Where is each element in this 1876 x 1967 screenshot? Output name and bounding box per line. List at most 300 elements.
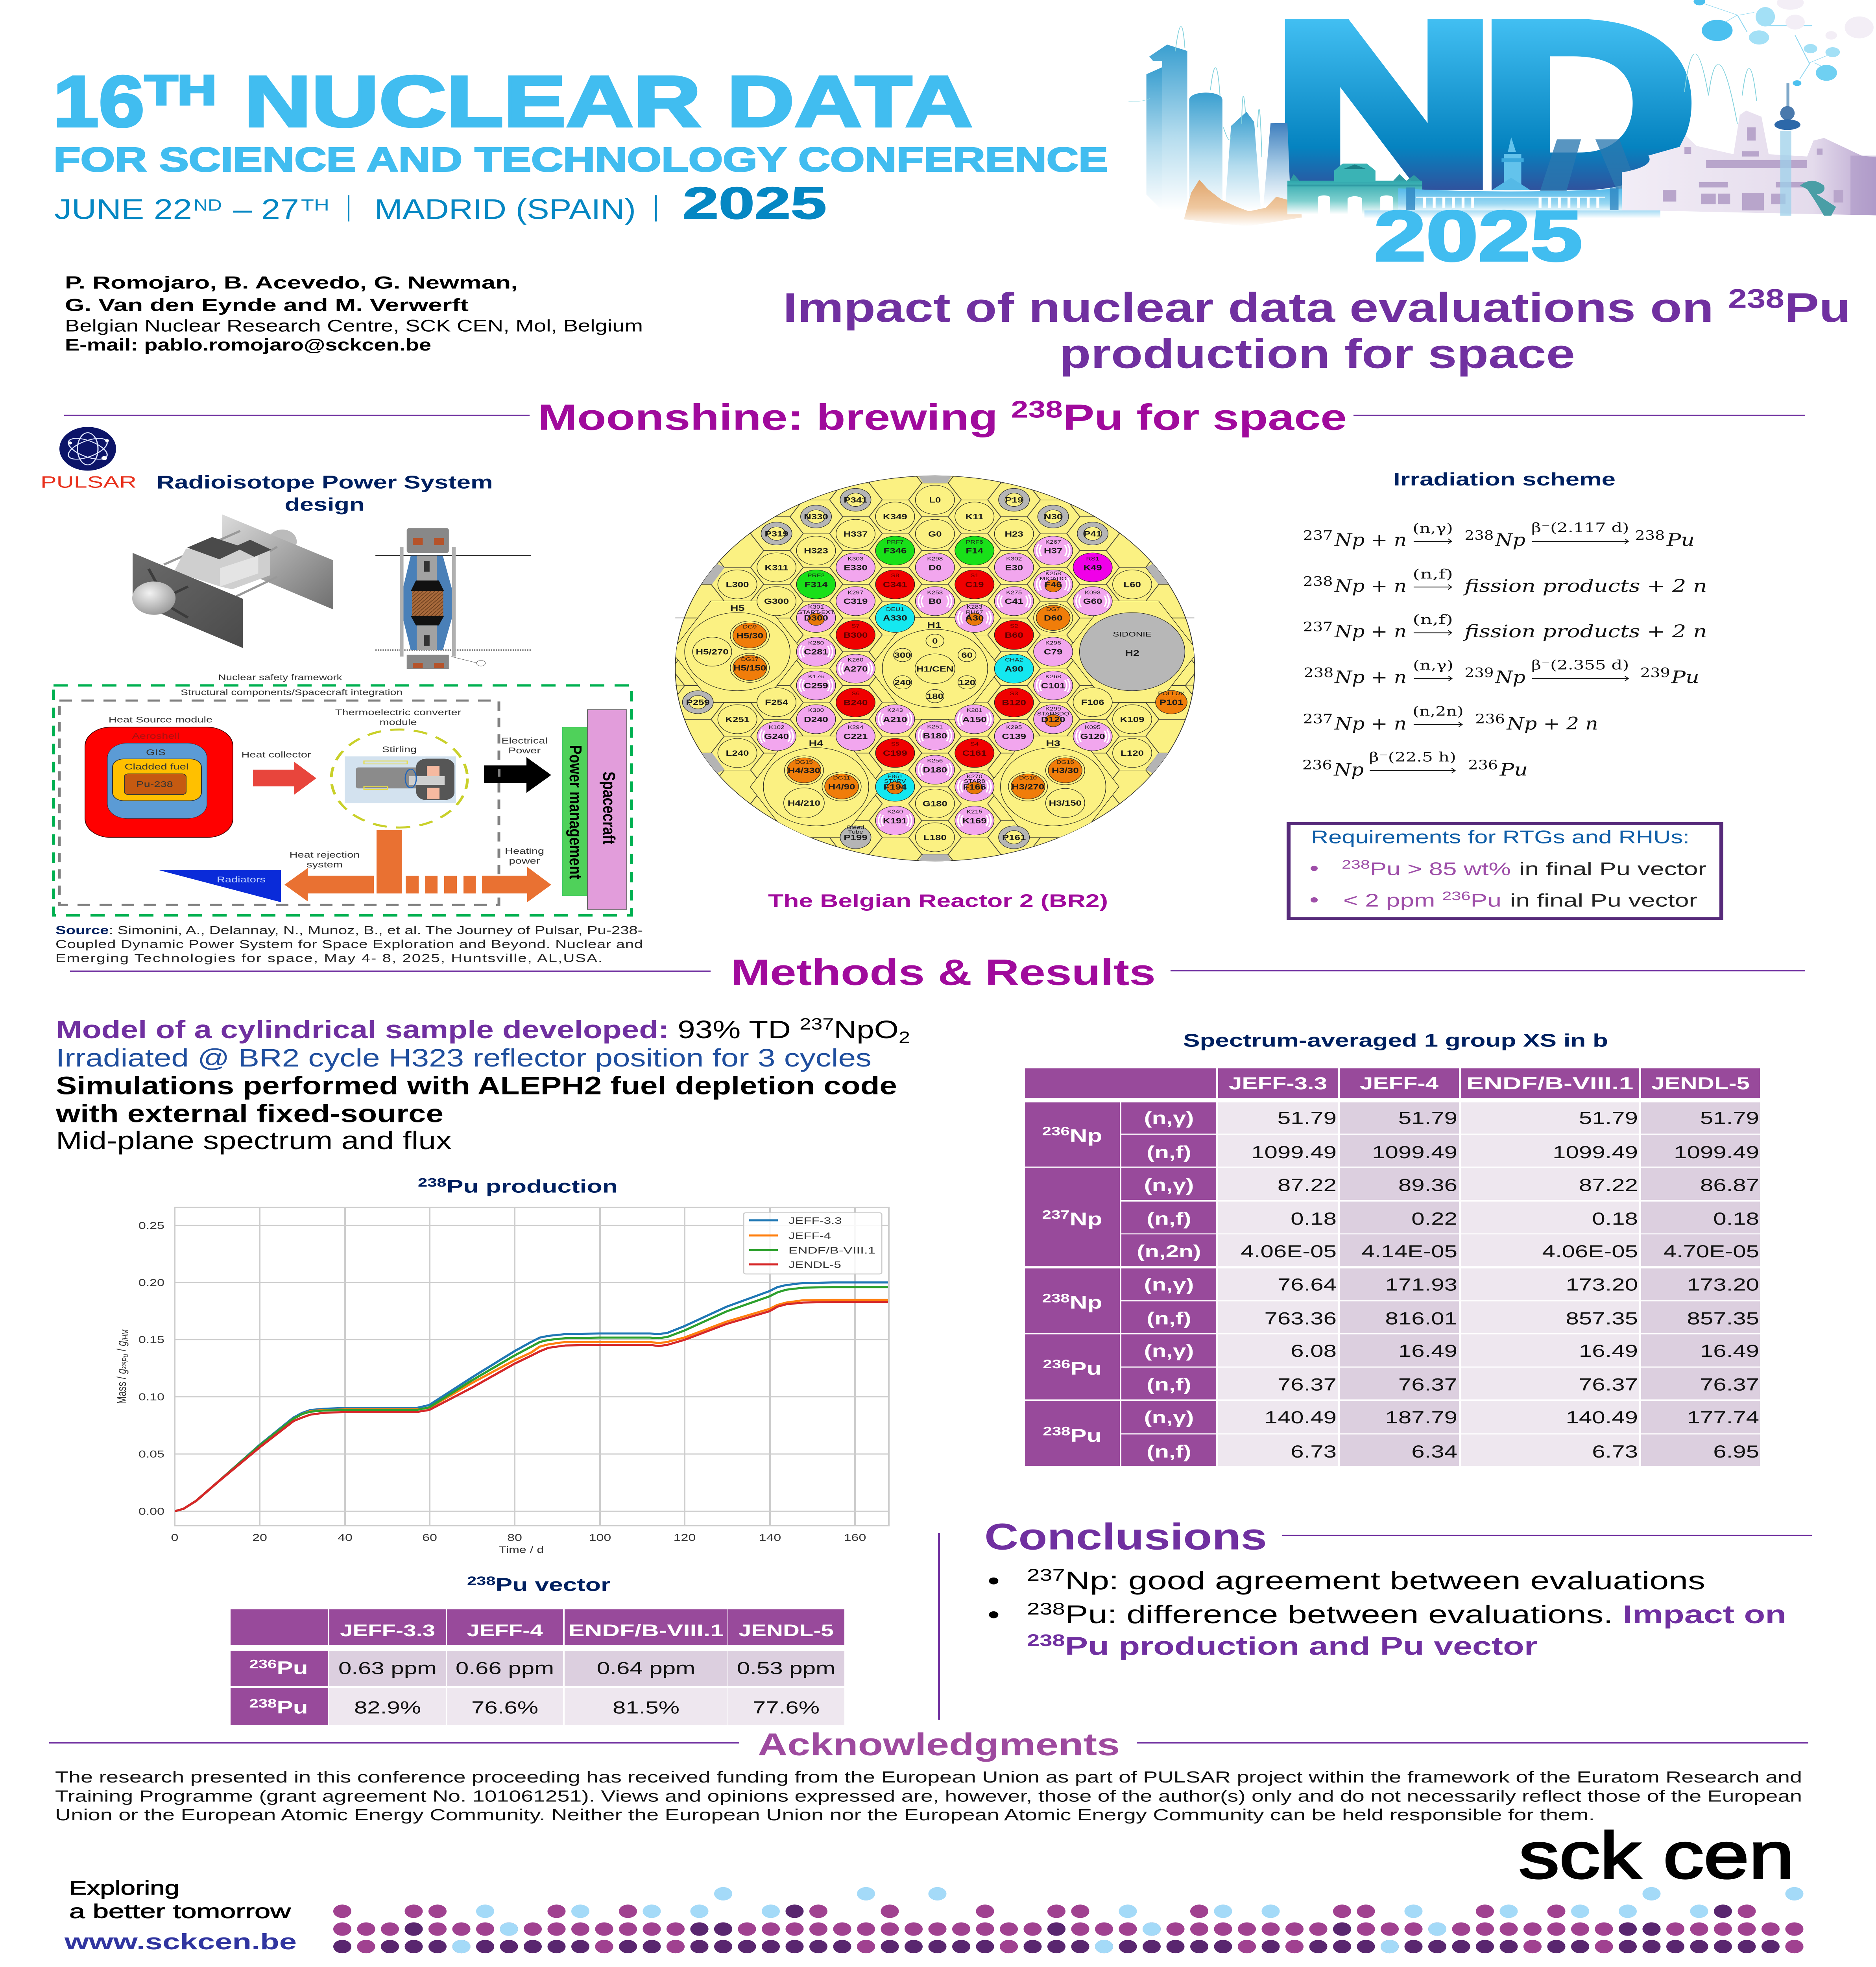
chart title: 238 bbox=[418, 1176, 447, 1189]
reaction 1: 237 bbox=[1303, 528, 1333, 543]
pink channels: C259 bbox=[804, 681, 828, 690]
reaction 5: Np + 2 n bbox=[1506, 714, 1598, 734]
title: 16th nuclear data: TH bbox=[145, 66, 216, 113]
model line: Model of a cylindrical sample developed: 93% TD bbox=[56, 1016, 800, 1044]
spectrum line: Mid-plane spectrum and flux bbox=[56, 1127, 452, 1155]
standard channels bbox=[692, 485, 1152, 852]
orange channels: DG9 bbox=[743, 624, 757, 630]
pink channels: K260 bbox=[848, 657, 864, 663]
y axis title: iHM bbox=[121, 1329, 131, 1341]
title: 16th nuclear data: 16 bbox=[53, 61, 144, 142]
radiators: Radiators bbox=[217, 875, 266, 884]
cyan channels: CHA2 bbox=[1005, 657, 1023, 663]
flux trap labels: H2 bbox=[1125, 649, 1139, 658]
reaction 3: Np + n bbox=[1334, 622, 1407, 642]
x tick labels: 120 bbox=[674, 1532, 696, 1543]
legend: JEFF-4 bbox=[788, 1231, 831, 1241]
isotope and reaction headers: (n,γ) bbox=[1144, 1408, 1194, 1427]
Kio towers bbox=[1540, 139, 1643, 203]
reaction 2: 238 bbox=[1303, 574, 1333, 589]
cross-section table title: Spectrum-averaged 1 group XS in b bbox=[1183, 1030, 1608, 1051]
table header bbox=[231, 1609, 844, 1645]
heat source module: Heat Source module bbox=[109, 715, 212, 725]
JEFF-3.3 values: 1099.49 bbox=[1251, 1142, 1337, 1162]
orange channels: DG17 bbox=[741, 657, 759, 662]
subtitle: for science and technology conference: FOR SCIENCE AND TECHNOLOGY CONFERENCE bbox=[54, 140, 1108, 179]
orange channels: DG15 bbox=[795, 760, 813, 765]
orange channels: DG16 bbox=[1056, 760, 1074, 765]
pink channels: K280 bbox=[808, 640, 824, 646]
source citation bbox=[55, 924, 643, 965]
y tick labels: 0.20 bbox=[138, 1277, 164, 1288]
pink channels: G120 bbox=[1080, 732, 1105, 741]
isotope and reaction headers: 238 bbox=[1042, 1292, 1070, 1305]
ring channels: P161 bbox=[1002, 833, 1026, 842]
bullet 2: • bbox=[988, 1600, 1000, 1629]
reaction 1: 238 bbox=[1635, 528, 1665, 543]
bullet 1: Np: good agreement between evaluations bbox=[1065, 1567, 1705, 1595]
isotope and reaction headers: (n,γ) bbox=[1144, 1341, 1194, 1361]
JEFF-3.3 values: 76.64 bbox=[1278, 1275, 1337, 1295]
model line: NpO bbox=[834, 1016, 899, 1044]
line chart: 238Pu production bbox=[114, 1207, 889, 1555]
requirement 2 bbox=[1311, 889, 1697, 911]
RPS engineering renders bbox=[132, 514, 531, 669]
standard channels: H4/210 bbox=[788, 799, 820, 807]
reaction 1: Pu bbox=[1666, 530, 1695, 550]
heading: irradiation scheme: Irradiation scheme bbox=[1393, 469, 1616, 489]
standard channels: L180 bbox=[923, 833, 947, 842]
orange channels: H3/270 bbox=[1012, 782, 1044, 791]
magenta channel K49 bbox=[1073, 553, 1112, 582]
bullet 1: 237 bbox=[1027, 1565, 1065, 1584]
isotope and reaction headers: (n,f) bbox=[1147, 1442, 1191, 1461]
reaction 4: 238 bbox=[1304, 665, 1333, 680]
tagline: Exploring bbox=[69, 1877, 179, 1899]
irradiation line: Irradiated @ BR2 cycle H323 reflector position for 3 cycles bbox=[56, 1044, 872, 1072]
pink channels: G240 bbox=[764, 732, 789, 741]
heading: RPS design: Radioisotope Power System bbox=[156, 472, 493, 493]
bullet 2: Pu production and Pu vector bbox=[1065, 1632, 1538, 1661]
JENDL-5 values: 16.49 bbox=[1700, 1341, 1759, 1361]
standard channels: H5/270 bbox=[696, 648, 729, 656]
conclusions heading: Conclusions bbox=[984, 1516, 1267, 1557]
isotope and reaction headers: Pu bbox=[1070, 1426, 1102, 1446]
ring channels: P41 bbox=[1084, 530, 1102, 538]
JEFF-3.3 values: 76.37 bbox=[1278, 1375, 1337, 1394]
reaction 1: Np + n bbox=[1334, 530, 1407, 550]
standard channels: 60 bbox=[961, 651, 973, 659]
orange channels: H5/30 bbox=[736, 631, 763, 640]
ring channels: P19 bbox=[1005, 496, 1023, 504]
row 236Pu: 0.64 ppm bbox=[597, 1659, 695, 1678]
reaction 2: (n,f) bbox=[1413, 567, 1453, 582]
simulation line 1: Simulations performed with ALEPH2 fuel depletion code bbox=[56, 1072, 897, 1100]
flux trap labels: H1 bbox=[927, 621, 942, 630]
reaction 2 bbox=[1303, 567, 1707, 596]
green channels: F346 bbox=[883, 546, 907, 555]
reaction 6: β⁻(22.5 h) bbox=[1369, 750, 1456, 765]
pink channels: C281 bbox=[804, 648, 828, 656]
reactor core map bbox=[672, 475, 1198, 862]
standard channels: H1/CEN bbox=[916, 664, 954, 673]
reaction 3: fission products + 2 n bbox=[1463, 622, 1707, 642]
heading: RPS design bbox=[156, 472, 493, 515]
isotope and reaction headers bbox=[1025, 1102, 1216, 1466]
JENDL-5 values: 173.20 bbox=[1687, 1275, 1759, 1295]
date and place line: ND bbox=[194, 196, 222, 214]
ENDF/B-VIII.1 values: 1099.49 bbox=[1553, 1142, 1638, 1162]
bullet 2: 238 bbox=[1027, 1599, 1065, 1618]
pink channels: K251 bbox=[927, 724, 943, 730]
pink channels: K297 bbox=[848, 590, 864, 596]
spacecraft box: Spacecraft bbox=[599, 771, 619, 845]
pink channels: K102 bbox=[768, 725, 785, 730]
row 238Pu: Pu bbox=[277, 1697, 308, 1718]
red channels: S2 bbox=[1010, 624, 1018, 629]
JEFF-3.3 values: 87.22 bbox=[1278, 1175, 1337, 1195]
reaction 4: Pu bbox=[1671, 667, 1699, 688]
x tick labels: 100 bbox=[589, 1532, 611, 1543]
standard channels: K109 bbox=[1120, 715, 1144, 723]
author block bbox=[65, 273, 643, 354]
small table title: Pu vector bbox=[496, 1575, 611, 1595]
row 238Pu: 77.6% bbox=[753, 1698, 820, 1718]
orange channels: H4/330 bbox=[788, 766, 820, 775]
pink channels: D180 bbox=[923, 766, 947, 774]
row 236Pu bbox=[231, 1651, 844, 1686]
pink channels: D240 bbox=[804, 715, 828, 723]
thermoelectric converter module: Thermoelectric converter bbox=[335, 708, 462, 717]
pink channels: D300 bbox=[804, 614, 828, 622]
ENDF/B-VIII.1 values: 87.22 bbox=[1579, 1175, 1638, 1195]
magenta channel K49: RS1 bbox=[1086, 556, 1099, 562]
pink channels: K268 bbox=[1045, 674, 1061, 679]
reaction 1: 238 bbox=[1464, 528, 1494, 543]
JENDL-5 values: 177.74 bbox=[1687, 1408, 1759, 1427]
pink channels: A210 bbox=[883, 715, 907, 723]
date and place line bbox=[54, 178, 827, 228]
row 236Pu: Pu bbox=[277, 1658, 308, 1678]
ring channels bbox=[682, 488, 1108, 849]
power management box bbox=[562, 727, 587, 896]
nuclear safety frame label: Nuclear safety framework bbox=[218, 673, 342, 682]
row 236Pu: 0.63 ppm bbox=[338, 1659, 437, 1678]
isotope and reaction headers: 237 bbox=[1042, 1208, 1070, 1222]
standard channels: L60 bbox=[1123, 580, 1141, 589]
reaction 3 bbox=[1303, 612, 1707, 642]
model line: 237 bbox=[800, 1015, 834, 1033]
atom emblem bbox=[59, 427, 116, 471]
JEFF-4 values: 0.22 bbox=[1411, 1209, 1457, 1229]
JEFF-4 values: 4.14E-05 bbox=[1362, 1242, 1457, 1261]
logo letters ND bbox=[1272, 0, 1697, 234]
standard channels: L300 bbox=[726, 580, 749, 589]
heating power arrow bbox=[482, 847, 551, 902]
row 236Pu: 236 bbox=[249, 1657, 277, 1671]
legend: JEFF-3.3 bbox=[788, 1216, 842, 1226]
pink channels: K294 bbox=[848, 725, 864, 730]
standard channels: K11 bbox=[966, 512, 984, 521]
pink channels: K169 bbox=[962, 816, 987, 825]
red channels: C341 bbox=[883, 580, 907, 589]
red channels: C19 bbox=[965, 580, 984, 589]
poster title bbox=[783, 284, 1851, 377]
JEFF-3.3 values bbox=[1241, 1109, 1337, 1461]
red channels: S6 bbox=[851, 691, 860, 697]
ring channels: P259 bbox=[686, 698, 710, 707]
acknowledgments body bbox=[55, 1768, 1802, 1824]
requirement 2: Pu bbox=[1471, 890, 1501, 911]
x axis title: Time / d bbox=[499, 1544, 544, 1555]
pink channels: D0 bbox=[929, 563, 942, 572]
JEFF-3.3 values: 4.06E-05 bbox=[1241, 1242, 1337, 1261]
flux trap labels: H3 bbox=[1046, 739, 1060, 748]
ring channels: N30 bbox=[1044, 512, 1062, 521]
y tick labels: 0.00 bbox=[138, 1506, 164, 1517]
heat rejection system: system bbox=[307, 860, 343, 869]
pink channels: RH67 bbox=[966, 610, 983, 615]
heat rejection system bbox=[284, 830, 476, 901]
heating power arrow: Heating bbox=[505, 847, 544, 856]
date and place line: TH bbox=[301, 196, 329, 214]
x tick labels: 140 bbox=[759, 1532, 781, 1543]
reaction 6: Pu bbox=[1499, 760, 1528, 780]
title line 1: 238 bbox=[1728, 284, 1784, 314]
pink channels: K283 bbox=[967, 604, 982, 610]
grid and axes bbox=[175, 1207, 889, 1526]
isotope and reaction headers: (n,γ) bbox=[1144, 1109, 1194, 1128]
pink channels: K301 bbox=[808, 604, 824, 610]
nuclear reaction network bbox=[1128, 0, 1874, 157]
reaction 6: 236 bbox=[1302, 758, 1332, 773]
heat source module: GIS bbox=[146, 748, 166, 757]
x tick labels: 40 bbox=[338, 1532, 353, 1543]
JEFF-4 values: 76.37 bbox=[1398, 1375, 1457, 1394]
requirement 1: 238 bbox=[1342, 858, 1370, 871]
pink channels: K295 bbox=[1006, 725, 1022, 730]
ring channels: P199 bbox=[844, 833, 868, 842]
bullet 2 bbox=[988, 1599, 1786, 1661]
y axis title: g bbox=[114, 1341, 129, 1346]
reaction 6: Np bbox=[1333, 760, 1364, 780]
JEFF-3.3 values: 6.08 bbox=[1291, 1341, 1337, 1361]
pink channels: STARSDQ bbox=[1037, 711, 1069, 717]
JENDL-5 curve bbox=[175, 1302, 888, 1511]
small table title: 238 bbox=[467, 1574, 496, 1588]
JEFF-3.3 values: 140.49 bbox=[1265, 1408, 1337, 1427]
bullet 2: 238 bbox=[1027, 1631, 1065, 1650]
acknowledgments bbox=[49, 1727, 1808, 1824]
reaction 6: 236 bbox=[1468, 758, 1498, 773]
ENDF/B-VIII.1 values: 140.49 bbox=[1566, 1408, 1638, 1427]
y tick labels: 0.05 bbox=[138, 1449, 164, 1460]
ENDF/B-VIII.1 values bbox=[1542, 1109, 1638, 1461]
reaction 1: β⁻(2.117 d) bbox=[1531, 520, 1629, 535]
logo year 2025: 2025 bbox=[1374, 196, 1582, 276]
standard channels: 0 bbox=[932, 637, 938, 645]
isotope and reaction headers: (n,γ) bbox=[1144, 1175, 1194, 1195]
reaction 2: Np + n bbox=[1334, 576, 1407, 596]
green channels: PRF2 bbox=[807, 573, 825, 578]
row 236Pu: 0.53 ppm bbox=[737, 1659, 835, 1678]
thermoelectric converter module: module bbox=[379, 718, 417, 727]
colonnade and monument bbox=[1398, 137, 1627, 210]
row 238Pu: 76.6% bbox=[471, 1698, 538, 1718]
orange channels bbox=[730, 603, 1187, 801]
standard channels: F106 bbox=[1081, 698, 1104, 707]
magenta channel K49: K49 bbox=[1083, 563, 1102, 572]
heat source module: Cladded fuel bbox=[125, 762, 188, 771]
pink channels: A30 bbox=[965, 614, 984, 622]
section heading: Methods and Results bbox=[70, 952, 1805, 993]
pink channels: K296 bbox=[1045, 640, 1061, 646]
Cibeles palace bbox=[1622, 111, 1876, 215]
e-mail: E-mail: pablo.romojaro@sckcen.be bbox=[65, 336, 431, 354]
requirements heading: Requirements for RTGs and RHUs: bbox=[1311, 827, 1690, 847]
orange channels: H4/90 bbox=[828, 782, 855, 791]
section heading: Moonshine: Pu for space bbox=[1063, 397, 1347, 438]
row 236Pu: 0.66 ppm bbox=[456, 1659, 554, 1678]
y axis title: Mass / g bbox=[114, 1369, 129, 1404]
JEFF-4 values: 51.79 bbox=[1398, 1109, 1457, 1128]
green channels bbox=[796, 536, 994, 599]
red channels: B300 bbox=[844, 631, 868, 639]
section heading: Methods and Results: Methods & Results bbox=[731, 952, 1156, 993]
x tick labels: 0 bbox=[171, 1532, 178, 1543]
header row bbox=[1025, 1068, 1760, 1098]
electrical power arrow: Power bbox=[508, 746, 541, 755]
methods text bbox=[55, 1015, 910, 1155]
pink channels: K095 bbox=[1085, 725, 1100, 730]
date and place line: 2025 bbox=[683, 178, 827, 228]
isotope and reaction headers: 238 bbox=[1043, 1425, 1070, 1438]
table: spectrum-averaged cross sections bbox=[1025, 1068, 1760, 1466]
ENDF/B-VIII.1 values: 76.37 bbox=[1579, 1375, 1638, 1394]
red channels: S4 bbox=[970, 742, 979, 747]
acknowledgments heading: Acknowledgments bbox=[758, 1727, 1120, 1762]
heat source module: Aeroshell bbox=[132, 732, 179, 741]
JENDL-5 values: 6.95 bbox=[1713, 1442, 1759, 1461]
x tick labels: 160 bbox=[844, 1532, 866, 1543]
JEFF-4 values: 16.49 bbox=[1398, 1341, 1457, 1361]
skyline illustration bbox=[1128, 0, 1876, 226]
source citation: Source: Simonini, A., Delannay, N., Munoz, B., et al. The Journey of Pulsar, Pu-238- bbox=[55, 924, 643, 937]
JEFF-3.3 values: 51.79 bbox=[1278, 1109, 1337, 1128]
standard channels: K251 bbox=[725, 715, 750, 723]
green channels: PRF6 bbox=[966, 539, 983, 545]
requirement 2: 236 bbox=[1442, 889, 1471, 903]
date and place line: MADRID (SPAIN) bbox=[375, 194, 636, 225]
standard channels: G180 bbox=[923, 799, 947, 808]
ring channels: Tube bbox=[848, 829, 863, 835]
orange channels: DG7 bbox=[1046, 607, 1060, 612]
red channels: B60 bbox=[1005, 631, 1023, 639]
pink channels: C319 bbox=[844, 597, 868, 605]
pink channels: K303 bbox=[848, 556, 864, 562]
x tick labels bbox=[171, 1532, 866, 1543]
Torrespana tower bbox=[1774, 83, 1800, 216]
reaction 1 bbox=[1303, 520, 1695, 550]
3D render of the system bbox=[132, 514, 333, 648]
pink channels: F166 bbox=[963, 782, 986, 791]
tagline bbox=[69, 1877, 291, 1922]
pink channels: K191 bbox=[883, 816, 907, 825]
orange channels: DG11 bbox=[833, 775, 850, 781]
reaction 5: 237 bbox=[1303, 712, 1333, 727]
pink channels: A150 bbox=[962, 715, 987, 723]
simulation line 2: with external fixed-source bbox=[55, 1100, 443, 1128]
standard channels: K311 bbox=[764, 563, 788, 572]
date and place line: – 27 bbox=[233, 194, 299, 225]
core disc bbox=[675, 475, 1195, 862]
green channels: F14 bbox=[966, 546, 983, 555]
website: www.sckcen.be bbox=[64, 1929, 297, 1954]
reaction 3: 237 bbox=[1303, 620, 1333, 635]
reaction 4: Np bbox=[1495, 667, 1525, 688]
bear and tree statue bbox=[1800, 181, 1836, 216]
pink channels bbox=[757, 536, 1112, 835]
cyan channels: STARV bbox=[884, 779, 907, 784]
header row: JENDL-5 bbox=[1651, 1074, 1750, 1093]
heat collector arrow bbox=[241, 750, 316, 795]
JEFF-3.3 values: 763.36 bbox=[1265, 1309, 1337, 1329]
Stirling engine cross-section bbox=[375, 528, 531, 669]
isotope and reaction headers: (n,f) bbox=[1147, 1309, 1191, 1329]
requirements box bbox=[1289, 823, 1721, 919]
x tick labels: 60 bbox=[422, 1532, 437, 1543]
authors line 1: P. Romojaro, B. Acevedo, G. Newman, bbox=[65, 273, 518, 293]
standard channels: K349 bbox=[883, 512, 907, 521]
cyan channels: A330 bbox=[883, 614, 907, 622]
table header: JEFF-3.3 bbox=[340, 1621, 435, 1640]
pink channels: K240 bbox=[887, 809, 903, 815]
heating power arrow: power bbox=[509, 856, 540, 866]
reaction 6 bbox=[1302, 750, 1528, 780]
pink channels: C139 bbox=[1002, 732, 1026, 741]
pink channels: C101 bbox=[1041, 681, 1065, 690]
table: 238Pu vector bbox=[231, 1609, 844, 1725]
legend: JENDL-5 bbox=[788, 1260, 841, 1270]
conference title bbox=[53, 61, 1108, 179]
pink channels: C79 bbox=[1044, 648, 1062, 656]
pink channels: K176 bbox=[808, 674, 824, 679]
system block diagram bbox=[54, 673, 631, 915]
standard channels: 180 bbox=[927, 692, 944, 701]
structural dashed frame bbox=[59, 701, 499, 905]
y axis title: / bbox=[114, 1346, 129, 1354]
standard channels: H323 bbox=[804, 546, 828, 555]
red channels: S7 bbox=[851, 624, 860, 629]
model line: 2 bbox=[899, 1028, 910, 1046]
x tick labels: 80 bbox=[507, 1532, 522, 1543]
standard channels: H337 bbox=[844, 530, 868, 538]
ENDF/B-VIII.1 values: 51.79 bbox=[1579, 1109, 1638, 1128]
ENDF/B-VIII.1 curve bbox=[175, 1287, 888, 1511]
pink channels: K302 bbox=[1006, 556, 1022, 562]
SCK CEN logo: sck cen bbox=[1519, 1819, 1794, 1892]
electrical power arrow: Electrical bbox=[501, 736, 548, 745]
JEFF-4 values: 187.79 bbox=[1385, 1408, 1457, 1427]
JEFF-3.3 values: 0.18 bbox=[1291, 1209, 1337, 1229]
pink channels: B0 bbox=[929, 597, 942, 605]
JENDL-5 values bbox=[1664, 1109, 1759, 1461]
y tick labels: 0.10 bbox=[138, 1392, 164, 1402]
pink channels: STAR8 bbox=[964, 779, 985, 784]
skyscrapers bbox=[1147, 44, 1291, 210]
ENDF/B-VIII.1 values: 857.35 bbox=[1566, 1309, 1638, 1329]
pink channels: K300 bbox=[808, 708, 824, 713]
